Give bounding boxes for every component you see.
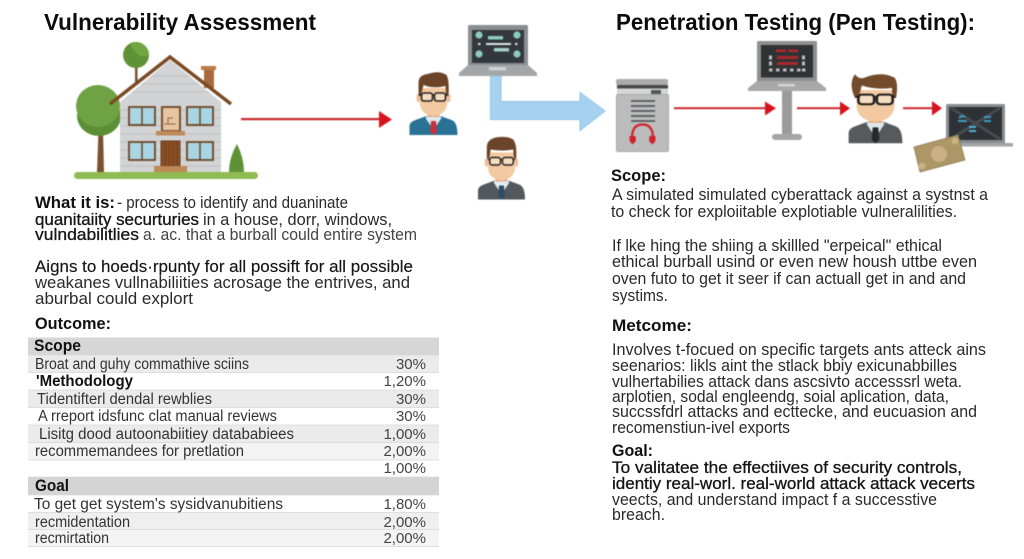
table row 11 bbox=[35, 530, 426, 547]
table row 3: 30% bbox=[396, 391, 426, 408]
text block: what it is: a. ac. that a burball could entire system bbox=[143, 226, 417, 244]
text block: aims: weakanes vullnabiliities acrosage the entrives, and bbox=[34, 274, 410, 292]
text block: simulated cyberattack bbox=[611, 186, 989, 221]
heading: scope: Scope: bbox=[611, 166, 666, 185]
table row 9: 1,80% bbox=[383, 496, 426, 513]
table row: methodology: 1,20% bbox=[383, 373, 426, 390]
icon: assessor with blue suit bbox=[410, 72, 458, 135]
text block: what it is: vulndabilitlies bbox=[35, 226, 139, 244]
text block: ethical burglar analogy bbox=[612, 237, 977, 305]
icon: compromised laptop bbox=[946, 104, 1013, 146]
text block: involves: vulhertabilies attack dans ascsivto accesssrl weta. bbox=[612, 373, 962, 391]
icon: report document with headset bbox=[616, 79, 668, 152]
text block: ethical burglar analogy: systims. bbox=[612, 287, 668, 305]
table row 11: recmirtation bbox=[35, 530, 109, 547]
table row 3 bbox=[37, 391, 426, 408]
table row 3: Tidentifterl dendal rewblies bbox=[37, 391, 212, 408]
table row 9: To get get system's sysidvanubitiens bbox=[34, 496, 283, 513]
text block: goal description: veects, and understand impact f a successtive bbox=[612, 491, 937, 509]
table row 10: 2,00% bbox=[383, 514, 426, 531]
table heading: scope: Scope bbox=[34, 336, 81, 355]
text block: what it is bbox=[35, 193, 417, 244]
table row 4 bbox=[38, 408, 426, 425]
text block: ethical burglar analogy: ethical burball usind or even new housh uttbe even bbox=[612, 253, 977, 271]
arrow: tester to compromised laptop bbox=[903, 101, 942, 116]
icon: assessor with grey suit bbox=[478, 137, 525, 200]
text block: involves: seenarios: likls aint the stlack bbiy exicunabbilles bbox=[612, 357, 957, 375]
table heading: goal: Goal bbox=[35, 476, 69, 495]
icon: banknote bbox=[914, 135, 965, 172]
text block: ethical burglar analogy: If lke hing the shiing a skillled "erpeical" ethical bbox=[612, 237, 942, 255]
table row 10: recmidentation bbox=[35, 514, 130, 531]
text block: involves: arplotien, sodal engleendg, soial aplication, data, bbox=[612, 388, 949, 406]
heading: metcome: Metcome: bbox=[612, 316, 692, 335]
text block: aims bbox=[34, 258, 413, 308]
table row: methodology: 'Methodology bbox=[36, 373, 133, 390]
text block: aims: Aigns to hoeds·rpunty for all possift for all possible bbox=[35, 258, 413, 276]
table row: methodology bbox=[36, 373, 426, 390]
table row 5: Lisitg dood autoonabiitiey datababiees bbox=[39, 426, 294, 443]
heading: outcome: Outcome: bbox=[35, 314, 111, 333]
text block: goal description bbox=[612, 459, 975, 524]
table row 5 bbox=[39, 426, 426, 443]
text block: what it is: in a house, dorr, windows, bbox=[203, 211, 392, 229]
table row 6 bbox=[35, 443, 426, 460]
text block: ethical burglar analogy: oven futo to get it seer if can actuall get in and and bbox=[612, 270, 966, 288]
text block: what it is: - process to identify and duaninate bbox=[117, 194, 348, 212]
table row 4: 30% bbox=[396, 408, 426, 425]
table row 11: 2,00% bbox=[383, 530, 426, 547]
table row 6: 2,00% bbox=[383, 443, 426, 460]
arrow: house to assessor bbox=[241, 111, 392, 128]
text block: aims: aburbal could explort bbox=[35, 290, 193, 308]
table row 1: Broat and guhy commathive sciins bbox=[35, 356, 249, 373]
text block: what it is: quanitaiity securturies bbox=[35, 211, 199, 229]
text block: simulated cyberattack: to check for exploiitable explotiable vulneralilities. bbox=[611, 203, 957, 221]
icon: pen tester bbox=[849, 74, 902, 143]
arrow: blue flow arrow bbox=[490, 76, 605, 130]
text block: involves bbox=[612, 341, 986, 437]
table row 6: recommemandees for pretlation bbox=[35, 443, 244, 460]
text block: what it is: What it is: bbox=[35, 193, 115, 212]
table row 1: 30% bbox=[396, 356, 426, 373]
text block: involves: succssfdrl attacks and ecttecke, and eucuasion and bbox=[612, 403, 977, 421]
table row 1 bbox=[35, 356, 426, 373]
text block: goal description: identiy real-worl. real-world attack attack vecerts bbox=[612, 475, 975, 493]
text block: goal description: breach. bbox=[612, 506, 665, 524]
title: Vulnerability Assessment: Vulnerability Assessment bbox=[44, 9, 316, 35]
icon: laptop with scan dashboard bbox=[459, 25, 537, 76]
table row 9 bbox=[34, 496, 426, 513]
icon: laptop on stand with attack console bbox=[748, 41, 826, 140]
icon: house with trees bbox=[74, 42, 258, 179]
text block: goal description: To valitatee the effectiives of security controls, bbox=[612, 459, 962, 477]
title: Penetration Testing: Penetration Testing (Pen Testing): bbox=[616, 9, 975, 35]
table row 7: 1,00% bbox=[383, 460, 426, 477]
heading: goal: Goal: bbox=[612, 441, 653, 460]
text block: simulated cyberattack: A simulated simulated cyberattack against a systnst a bbox=[612, 186, 989, 204]
table row 10 bbox=[35, 514, 426, 531]
table row 4: A rreport idsfunc clat manual reviews bbox=[38, 408, 277, 425]
text block: involves: recomenstiun-ivel exports bbox=[612, 419, 790, 437]
text block: involves: Involves t-focued on specific targets ants atteck ains bbox=[612, 341, 986, 359]
arrow: report to laptop bbox=[674, 102, 776, 116]
table row 5: 1,00% bbox=[383, 426, 426, 443]
arrow: laptop to tester bbox=[797, 102, 850, 116]
table: scope, methodology, goal bbox=[28, 336, 439, 547]
